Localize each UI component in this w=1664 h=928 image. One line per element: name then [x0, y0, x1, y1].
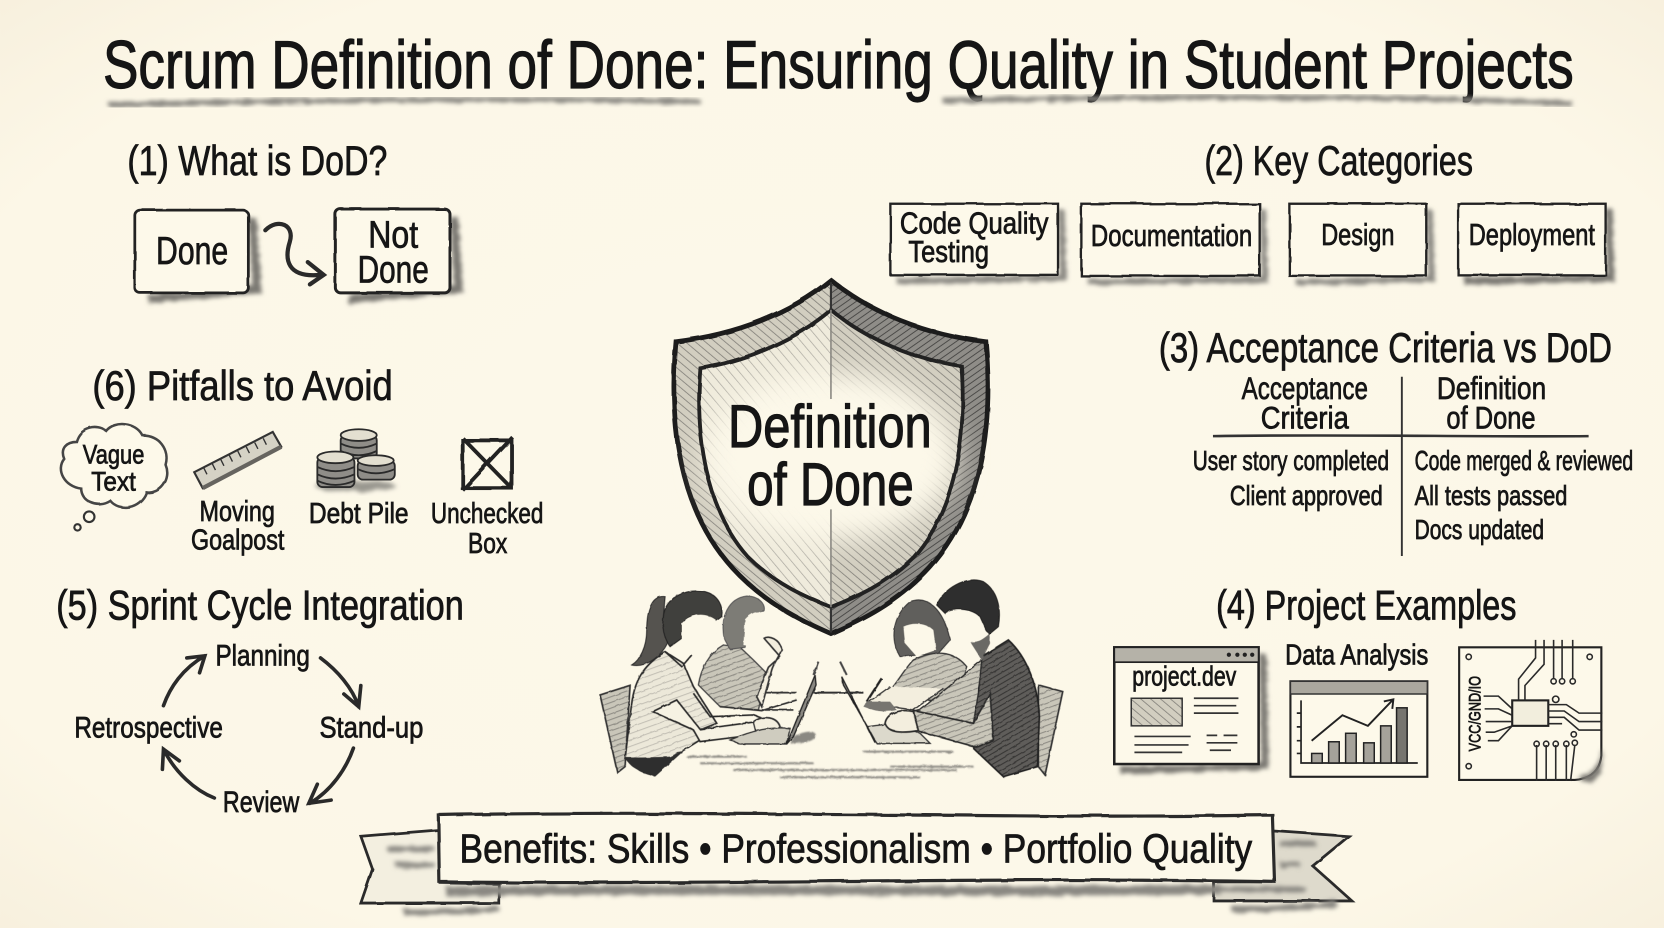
box: Documentation: Documentation [1091, 218, 1252, 253]
shield: Definition of Done: of Done [747, 450, 914, 518]
box: Documentation [1081, 204, 1265, 282]
illustration: students at laptops [600, 580, 1063, 777]
laptop: right [840, 662, 930, 743]
heading: Pitfalls to Avoid: (6) Pitfalls to Avoid [92, 363, 393, 409]
banner shading [387, 844, 1337, 913]
heading: Key Categories: (2) Key Categories [1204, 138, 1473, 184]
table: comparison: Criteria [1261, 400, 1349, 436]
icon: circuit board: VCC/GND/IO [1465, 676, 1484, 751]
panel: (2) Key Categories [890, 138, 1611, 282]
box: Code Quality Testing [890, 204, 1063, 281]
panel: (6) Pitfalls to Avoid [60, 363, 543, 560]
icon: debt pile coins [309, 429, 409, 530]
heading: Project Examples: (4) Project Examples [1216, 583, 1516, 629]
box: Not Done [335, 209, 458, 299]
label: Moving Goalpost: Goalpost [191, 525, 284, 557]
table: comparison [1193, 370, 1633, 556]
shield: Definition of Done: Definition [728, 392, 932, 460]
panel: (1) What is DoD [127, 138, 458, 299]
table: comparison: Client approved [1230, 480, 1383, 511]
panel: (4) Project Examples [1114, 583, 1603, 783]
table surface [687, 693, 973, 777]
student: front right [885, 580, 1063, 777]
box: Design: Design [1321, 217, 1394, 252]
icon: unchecked box: Box [468, 528, 508, 560]
box: Done [135, 210, 257, 299]
label: Moving Goalpost [191, 496, 284, 557]
box: Design [1289, 204, 1432, 282]
icon: unchecked box: Unchecked [431, 498, 543, 530]
table: comparison: All tests passed [1415, 480, 1567, 511]
table: comparison: Definition [1437, 370, 1546, 406]
diagram: sprint cycle [74, 639, 423, 819]
banner: benefits [361, 813, 1352, 913]
banner main ribbon [438, 813, 1275, 883]
box: Not Done: Not [368, 213, 418, 256]
diagram: sprint cycle: Retrospective [74, 712, 223, 745]
heading: What is DoD: (1) What is DoD? [127, 138, 387, 184]
panel: (5) Sprint Cycle Integration [56, 583, 464, 819]
table: comparison: User story completed [1193, 445, 1389, 476]
diagram: sprint cycle: Stand-up [319, 712, 423, 745]
student: back right [863, 600, 967, 711]
diagram: sprint cycle: Planning [215, 639, 310, 672]
banner text: Benefits: Skills • Professionalism • Portfolio Quality [460, 826, 1253, 872]
box: Deployment [1458, 204, 1611, 281]
label: Moving Goalpost: Moving [200, 496, 275, 528]
label: Data Analysis: Data Analysis [1285, 639, 1428, 671]
arrow: Done to Not Done [265, 224, 324, 284]
panel: (3) Acceptance Criteria vs DoD [1159, 325, 1633, 556]
table: comparison: Acceptance [1242, 370, 1368, 406]
shield: Definition of Done [674, 280, 988, 634]
icon: moving goalpost ruler [194, 432, 281, 488]
box: Done: Done [156, 229, 228, 273]
table: comparison: of Done [1446, 400, 1536, 436]
chart: data analysis window [1290, 681, 1427, 777]
box: Code Quality Testing: Code Quality [900, 205, 1049, 240]
icon: unchecked box [431, 437, 543, 560]
heading: Sprint Cycle Integration: (5) Sprint Cycle Integration [56, 583, 464, 629]
icon: circuit board [1459, 640, 1603, 783]
diagram: sprint cycle: Review [223, 786, 300, 819]
student: front left with ponytail [600, 591, 780, 777]
icon: website window: project.dev [1132, 661, 1236, 692]
student: back left [698, 596, 797, 711]
icon: debt pile coins: Debt Pile [309, 498, 409, 530]
laptop: left [730, 662, 818, 744]
icon: vague text cloud: Vague [83, 440, 144, 470]
banner right tail [1214, 831, 1352, 901]
box: Deployment: Deployment [1469, 217, 1595, 252]
box: Code Quality Testing: Testing [908, 234, 989, 269]
icon: vague text cloud [60, 424, 167, 531]
box: Not Done: Done [358, 248, 429, 291]
banner left tail [361, 830, 499, 903]
table: comparison: Docs updated [1415, 514, 1544, 545]
icon: vague text cloud: Text [91, 466, 136, 496]
icon: website window [1114, 647, 1265, 770]
